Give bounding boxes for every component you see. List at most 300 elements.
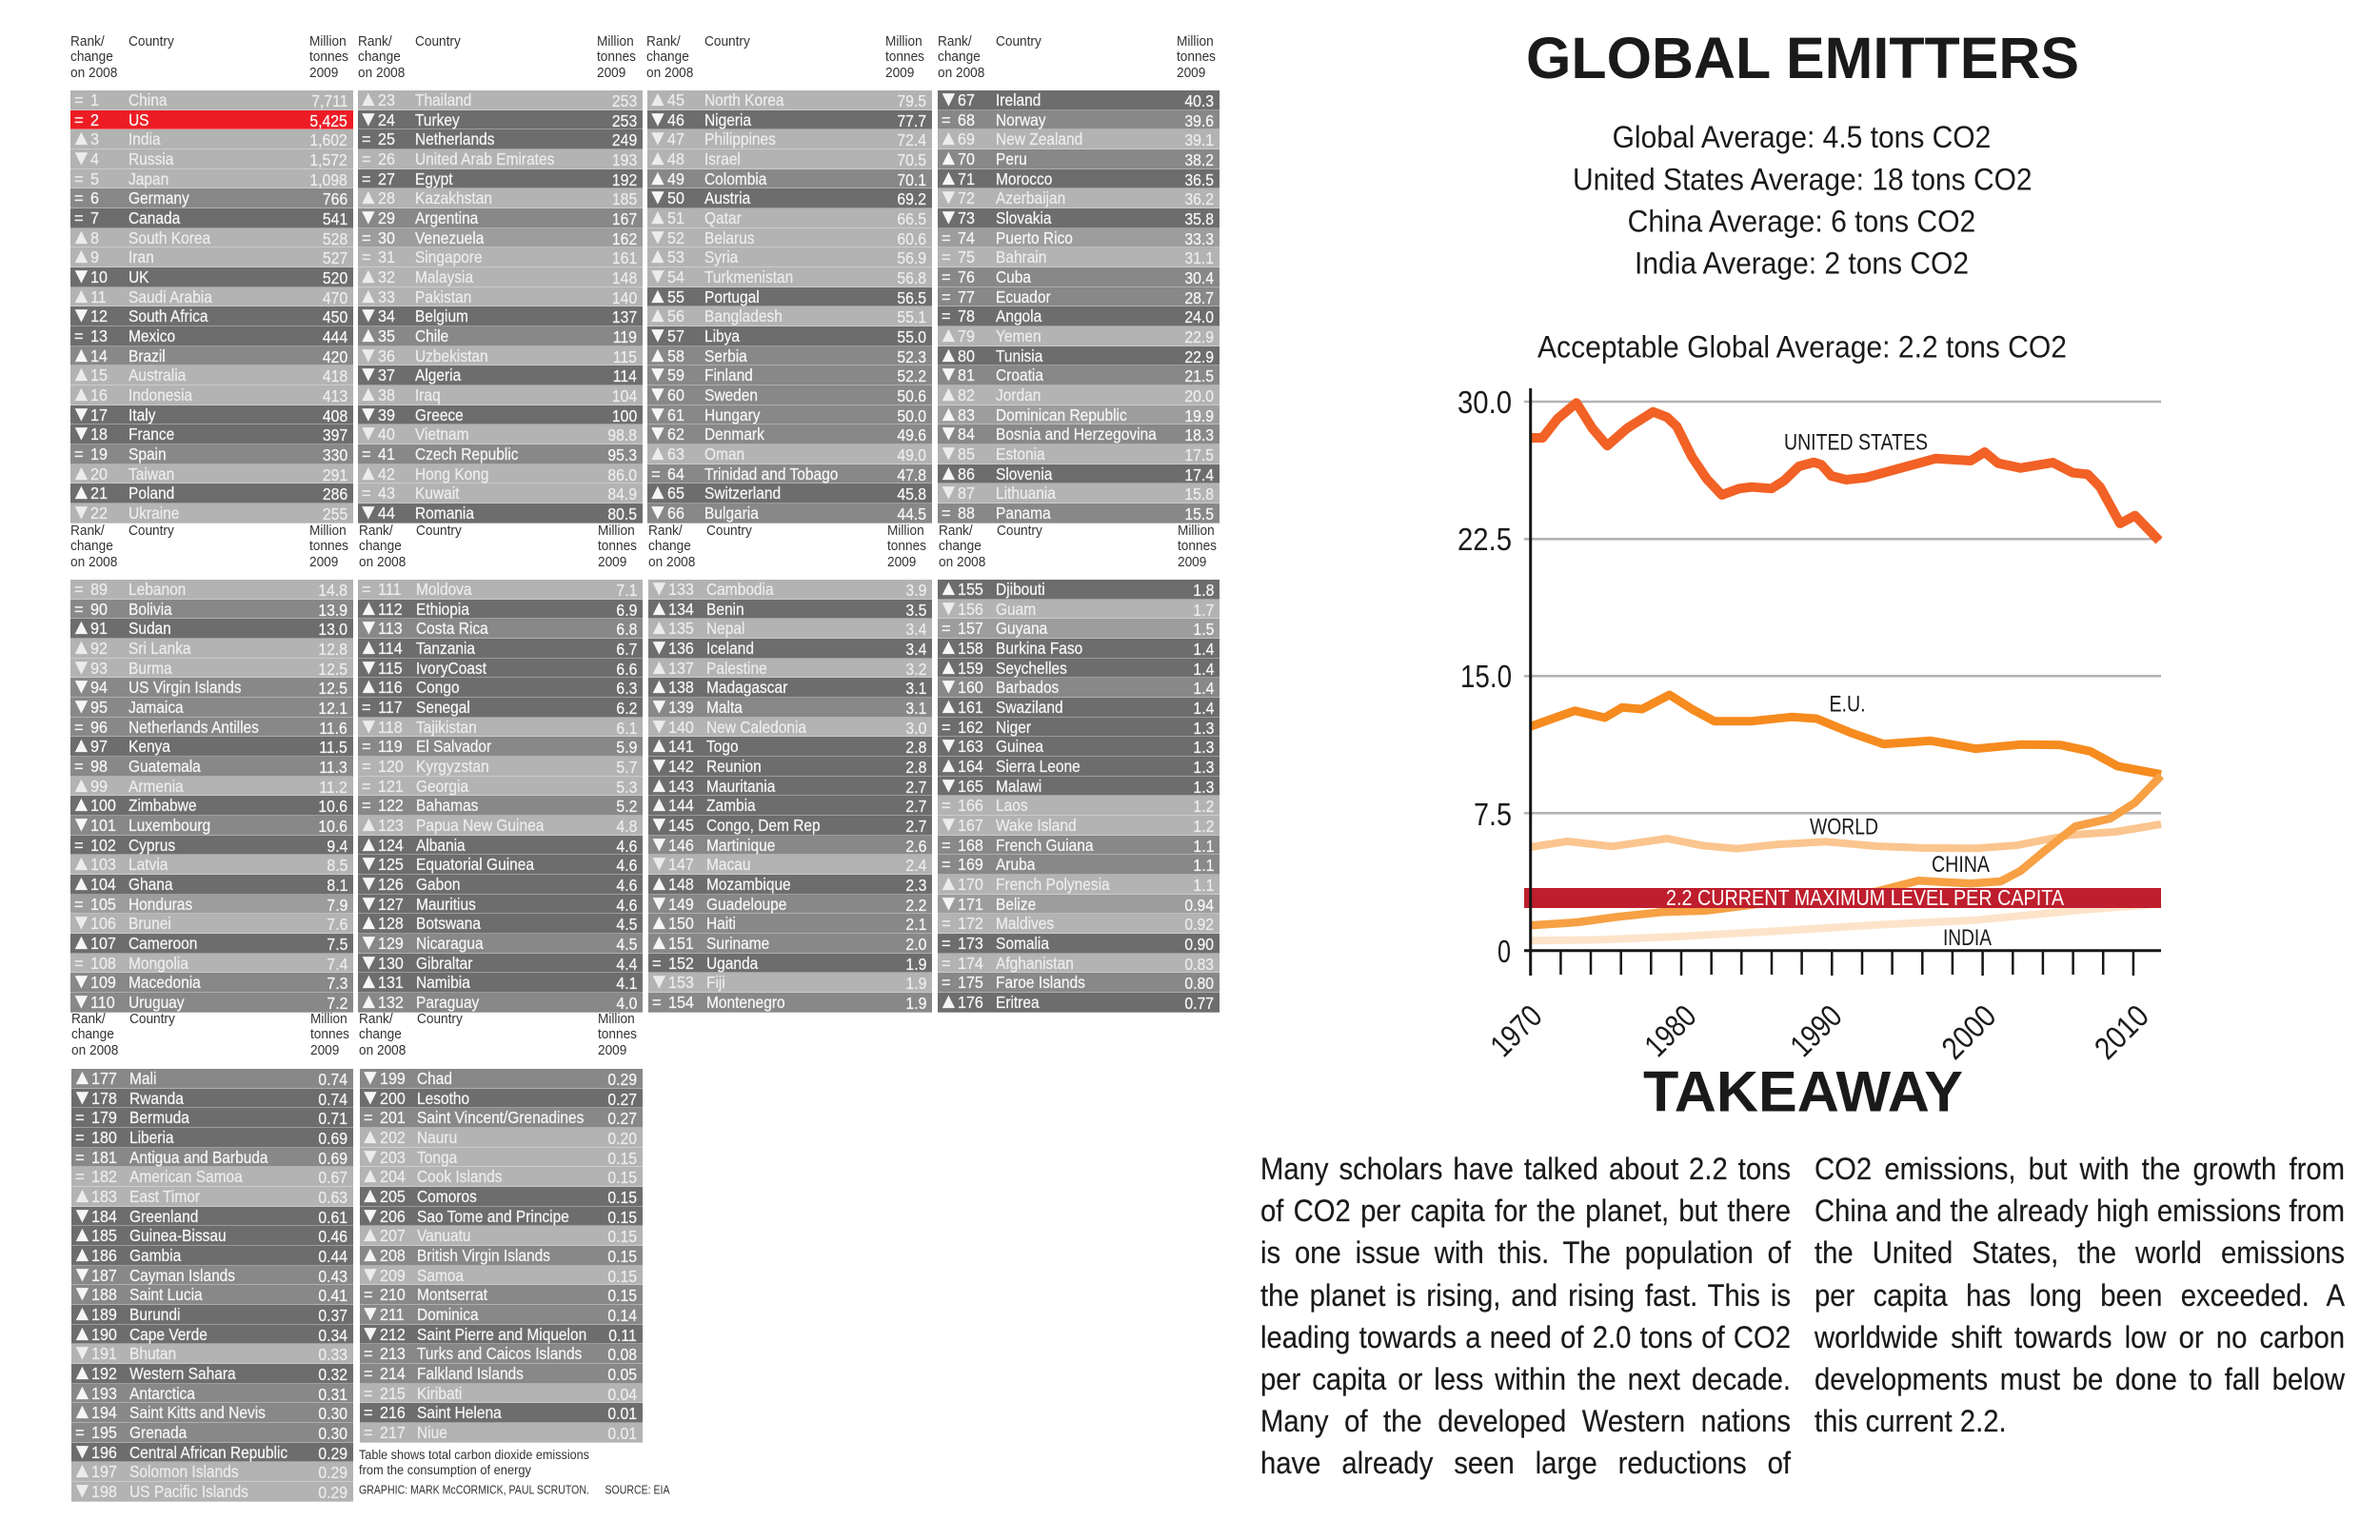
table column: ranks 1-22: 1 [90, 90, 99, 109]
table column: ranks 133-154: Togo [706, 737, 738, 756]
table column: ranks 177-198: 177 [91, 1069, 117, 1088]
table column: ranks 89-110: Guatemala [128, 757, 200, 776]
table column: ranks 23-44: = [362, 444, 370, 464]
table column: ranks 67-88: 21.5 [1184, 366, 1214, 385]
table column: ranks 67-88: Bosnia and Herzegovina [996, 424, 1156, 444]
table column: ranks 23-44: 23 [377, 90, 394, 109]
table column: ranks 177-198: 0.29 [318, 1444, 347, 1463]
table header: ranks 133-154: Million [887, 523, 924, 539]
y-axis labels: 30.0 [1458, 385, 1512, 421]
table column: ranks 67-88: 81 [958, 365, 975, 385]
table column: ranks 133-154: 2.7 [905, 797, 926, 816]
table column: ranks 111-132: 125 [378, 855, 404, 874]
table column: ranks 199-217: 0.11 [609, 1326, 637, 1345]
table column: ranks 199-217: = [364, 1344, 372, 1363]
table column: ranks 133-154: 3.1 [905, 679, 926, 698]
table header: ranks 199-217: on 2008 [359, 1042, 407, 1058]
table column: ranks 111-132: Georgia [415, 777, 468, 796]
takeaway text: right column: this current 2.2. [1815, 1404, 2007, 1438]
table column: ranks 67-88: 31.1 [1184, 248, 1214, 267]
table column: ranks 45-66: ▼ [647, 323, 668, 346]
table column: ranks 155-176: 166 [958, 796, 983, 815]
table column: ranks 67-88: 35.8 [1184, 209, 1214, 228]
table column: ranks 133-154: New Caledonia [706, 718, 806, 737]
table column: ranks 23-44: 27 [377, 169, 394, 188]
table column: ranks 67-88: Angola [996, 306, 1041, 326]
table column: ranks 155-176: ▲ [939, 753, 959, 777]
table column: ranks 67-88: 22.9 [1184, 327, 1214, 346]
table column: ranks 67-88: 39.1 [1184, 130, 1214, 149]
table column: ranks 199-217: 212 [379, 1325, 405, 1344]
table column: ranks 111-132: Congo [415, 678, 459, 697]
table header: ranks 67-88: on 2008 [938, 65, 984, 81]
red bar: 2.2 current maximum level: 2.2 CURRENT MAXIMUM LEVEL PER CAPITA [1666, 885, 2065, 910]
table column: ranks 133-154: Guadeloupe [706, 895, 786, 914]
table column: ranks 177-198: 0.32 [318, 1365, 347, 1384]
table column: ranks 23-44: 100 [612, 406, 637, 425]
table column: ranks 67-88: Azerbaijan [996, 188, 1065, 207]
table column: ranks 23-44: 43 [377, 484, 394, 503]
table column: ranks 1-22: 286 [323, 484, 347, 503]
table column: ranks 177-198: Mali [129, 1069, 156, 1088]
takeaway text: left column: is one issue with this. The population of [1260, 1235, 1791, 1270]
table column: ranks 45-66: Israel [704, 149, 741, 168]
table column: ranks 155-176: ▼ [939, 674, 959, 698]
table column: ranks 45-66: 47 [666, 129, 684, 148]
table column: ranks 67-88: Morocco [996, 169, 1052, 188]
table column: ranks 177-198: ▲ [72, 1380, 92, 1404]
table column: ranks 111-132: 5.2 [616, 797, 637, 816]
series labels: WORLD [1810, 814, 1878, 839]
table column: ranks 45-66: 77.7 [897, 111, 926, 130]
table column: ranks 111-132: Nicaragua [415, 934, 483, 953]
table header: ranks 45-66 [646, 33, 924, 81]
table header: ranks 177-198: on 2008 [71, 1042, 118, 1058]
table column: ranks 111-132: 119 [378, 737, 403, 756]
table column: ranks 45-66: ▼ [647, 126, 668, 149]
table column: ranks 199-217: Kiribati [417, 1384, 462, 1403]
table column: ranks 133-154: 2.8 [905, 758, 926, 777]
table column: ranks 23-44: 192 [612, 170, 637, 189]
table column: ranks 1-22: 5,425 [310, 111, 347, 130]
table column: ranks 111-132: 4.6 [616, 876, 637, 895]
table column: ranks 23-44: Uzbekistan [415, 346, 488, 365]
table column: ranks 23-44: Iraq [415, 385, 441, 405]
table column: ranks 133-154: Congo, Dem Rep [706, 816, 820, 835]
table header: ranks 155-176: change [939, 538, 982, 554]
table column: ranks 1-22: 541 [323, 209, 347, 228]
table column: ranks 199-217: Cook Islands [417, 1167, 503, 1186]
table column: ranks 1-22: 11 [90, 287, 107, 306]
table column: ranks 67-88: = [942, 267, 951, 286]
table column: ranks 155-176: 161 [958, 698, 983, 717]
table column: ranks 45-66: Switzerland [704, 484, 781, 503]
table column: ranks 45-66: 49.0 [897, 445, 926, 464]
table header: ranks 67-88: tonnes [1177, 49, 1216, 65]
table column: ranks 1-22: 7 [90, 208, 99, 227]
table column: ranks 1-22: Russia [128, 149, 173, 168]
table column: ranks 177-198: 193 [91, 1384, 117, 1403]
table column: ranks 199-217: 208 [379, 1246, 405, 1265]
table column: ranks 155-176: ▲ [939, 635, 959, 659]
table column: ranks 199-217: Montserrat [417, 1285, 487, 1304]
table column: ranks 23-44: = [362, 484, 370, 503]
table column: ranks 1-22: 9 [90, 247, 99, 267]
table column: ranks 89-110: = [74, 954, 84, 973]
table column: ranks 199-217: Nauru [417, 1128, 457, 1147]
table column: ranks 1-22: 6 [90, 188, 99, 207]
table column: ranks 177-198: 0.43 [318, 1267, 347, 1286]
table column: ranks 89-110: 8.5 [327, 856, 347, 875]
table column: ranks 111-132: 4.5 [616, 935, 637, 954]
table note and credits: GRAPHIC: MARK McCORMICK, PAUL SCRUTON. [359, 1483, 589, 1496]
table header: ranks 89-110: 2009 [309, 554, 338, 570]
table column: ranks 111-132: ▼ [358, 655, 379, 679]
table header: ranks 133-154: on 2008 [648, 554, 695, 570]
table column: ranks 111-132: 117 [378, 698, 403, 717]
table column: ranks 23-44: Czech Republic [415, 444, 518, 464]
table column: ranks 45-66: 60.6 [897, 229, 926, 248]
table column: ranks 133-154: 145 [668, 816, 694, 835]
table column: ranks 155-176: ▼ [939, 773, 959, 797]
table column: ranks 45-66: Bangladesh [704, 306, 783, 326]
table column: ranks 155-176: 164 [958, 757, 983, 776]
table column: ranks 45-66: 61 [666, 405, 684, 424]
table column: ranks 89-110: 97 [90, 737, 108, 756]
table column: ranks 67-88: ▼ [939, 362, 959, 385]
table column: ranks 155-176: = [942, 973, 951, 992]
table column: ranks 23-44: 37 [377, 365, 394, 385]
table column: ranks 23-44: ▲ [358, 382, 379, 405]
table column: ranks 67-88: 36.2 [1184, 189, 1214, 208]
table column: ranks 111-132: Albania [415, 836, 465, 855]
table column: ranks 133-154: 141 [668, 737, 694, 756]
table column: ranks 67-88: Dominican Republic [996, 405, 1126, 424]
table column: ranks 155-176: 165 [958, 777, 983, 796]
table column: ranks 199-217: = [364, 1285, 372, 1304]
table column: ranks 67-88: 86 [958, 464, 975, 484]
table column: ranks 23-44: 36 [377, 346, 394, 365]
table column: ranks 1-22: 21 [90, 484, 108, 503]
table column: ranks 133-154: 137 [668, 659, 694, 678]
table column: ranks 155-176: ▲ [939, 871, 959, 895]
table column: ranks 1-22: Canada [128, 208, 180, 227]
table column: ranks 155-176: = [942, 934, 951, 953]
table column: ranks 45-66: 72.4 [897, 130, 926, 149]
table column: ranks 23-44: ▼ [358, 205, 379, 228]
table column: ranks 133-154: 142 [668, 757, 694, 776]
table column: ranks 1-22: 19 [90, 444, 108, 464]
table column: ranks 111-132: 114 [378, 639, 403, 658]
table column: ranks 133-154: 134 [668, 600, 694, 619]
table header: ranks 89-110: Rank/ [70, 523, 105, 539]
takeaway text: left column: Many of the developed Western nations [1260, 1404, 1791, 1438]
table column: ranks 1-22: 470 [323, 288, 347, 307]
table column: ranks 1-22: = [74, 326, 84, 346]
table column: ranks 133-154: 140 [668, 718, 694, 737]
table column: ranks 45-66: Colombia [704, 169, 766, 188]
table header: ranks 133-154: Rank/ [648, 523, 683, 539]
table column: ranks 177-198: ▲ [72, 1242, 92, 1266]
table column: ranks 155-176: Barbados [996, 678, 1059, 697]
table column: ranks 155-176: 155 [958, 580, 983, 599]
table column: ranks 89-110: Ghana [128, 875, 172, 894]
table column: ranks 67-88: Tunisia [996, 346, 1042, 365]
table column: ranks 89-110: 9.4 [327, 837, 347, 856]
table column: ranks 177-198: 181 [91, 1148, 117, 1167]
table column: ranks 155-176: ▼ [939, 733, 959, 757]
table column: ranks 155-176: ▲ [939, 576, 959, 600]
table header: ranks 1-22: on 2008 [70, 65, 117, 81]
per-capita averages: India Average: 2 tons CO2 [1635, 246, 1969, 280]
table header: ranks 23-44: 2009 [596, 65, 625, 81]
table column: ranks 199-217: Falkland Islands [417, 1364, 524, 1383]
table column: ranks 111-132: Tanzania [415, 639, 475, 658]
table column: ranks 89-110: Mongolia [128, 954, 188, 973]
table column: ranks 111-132: 112 [378, 600, 403, 619]
table column: ranks 45-66: Bulgaria [704, 503, 759, 523]
table column: ranks 67-88: = [942, 110, 951, 129]
series labels [1784, 430, 1992, 951]
table column: ranks 133-154: ▲ [649, 596, 669, 620]
table column: ranks 177-198: Bhutan [129, 1344, 176, 1363]
table column: ranks 89-110: ▼ [70, 910, 91, 934]
table column: ranks 89-110: 11.6 [320, 719, 347, 738]
table column: ranks 1-22: = [74, 169, 84, 188]
table column: ranks 133-154: 3.1 [905, 699, 926, 718]
table column: ranks 199-217: 0.01 [607, 1424, 637, 1443]
table column: ranks 111-132: ▼ [358, 615, 379, 639]
per-capita averages [1573, 120, 2033, 280]
table column: ranks 133-154: ▲ [649, 871, 669, 895]
table header: ranks 67-88: Country [996, 33, 1041, 49]
table column: ranks 177-198: ▼ [72, 1203, 92, 1227]
table column: ranks 1-22: 13 [90, 326, 108, 346]
table column: ranks 67-88: 68 [958, 110, 975, 129]
table column: ranks 111-132: Tajikistan [415, 718, 476, 737]
table column: ranks 23-44: 84.9 [607, 484, 637, 503]
table column: ranks 23-44: 98.8 [607, 425, 637, 444]
table column: ranks 199-217: ▲ [360, 1163, 381, 1187]
table header: ranks 155-176: Rank/ [939, 523, 973, 539]
table column: ranks 111-132: = [362, 757, 371, 776]
table column: ranks 177-198: ▲ [72, 1360, 92, 1384]
table column: ranks 133-154: 139 [668, 698, 694, 717]
table column: ranks 89-110: 96 [90, 718, 108, 737]
table column: ranks 177-198: Antarctica [129, 1384, 194, 1403]
table column: ranks 133-154: Uganda [706, 954, 758, 973]
table column: ranks 155-176: Somalia [996, 934, 1048, 953]
table column: ranks 133-154: 2.3 [905, 876, 926, 895]
table header: ranks 45-66: 2009 [885, 65, 914, 81]
table column: ranks 89-110: 100 [90, 796, 116, 815]
table column: ranks 89-110: 98 [90, 757, 108, 776]
table header: ranks 45-66: change [646, 49, 689, 65]
table column: ranks 1-22: Ukraine [128, 503, 179, 523]
table column: ranks 67-88: Slovenia [996, 464, 1052, 484]
table column: ranks 111-132: ▲ [358, 832, 379, 856]
table column: ranks 133-154: 148 [668, 875, 694, 894]
table column: ranks 177-198: ▲ [72, 1399, 92, 1423]
table column: ranks 1-22: 528 [323, 229, 347, 248]
table column: ranks 45-66: ▼ [647, 402, 668, 425]
table header: ranks 111-132: Rank/ [359, 523, 392, 539]
table header: ranks 45-66: tonnes [885, 49, 924, 65]
table header: ranks 1-22: Million [309, 33, 347, 49]
table column: ranks 89-110: 110 [90, 993, 115, 1012]
table column: ranks 177-198: 178 [91, 1089, 117, 1108]
table column: ranks 1-22: = [74, 444, 84, 464]
table column: ranks 111-132: 6.1 [616, 719, 637, 738]
table column: ranks 111-132: 4.8 [616, 817, 637, 836]
table column: ranks 177-198: 0.31 [318, 1385, 347, 1404]
table column: ranks 67-88: ▲ [939, 166, 959, 189]
table column: ranks 23-44: = [362, 129, 370, 148]
table column: ranks 23-44: Venezuela [415, 228, 484, 247]
x-axis year labels: 1990 [1783, 998, 1849, 1063]
table column: ranks 45-66: Trinidad and Tobago [704, 464, 838, 484]
table column: ranks 199-217: = [364, 1364, 372, 1383]
table column: ranks 199-217: 0.15 [607, 1286, 637, 1305]
table column: ranks 89-110: Luxembourg [128, 816, 210, 835]
table column: ranks 45-66: 50.6 [897, 386, 926, 405]
table column: ranks 67-88: 18.3 [1184, 425, 1214, 444]
x-axis year labels: 1980 [1637, 998, 1703, 1063]
table column: ranks 199-217: ▼ [360, 1085, 381, 1109]
table column: ranks 45-66: 52.3 [897, 347, 926, 366]
table column: ranks 23-44: 39 [377, 405, 394, 424]
table column: ranks 155-176: Maldives [996, 914, 1054, 933]
table column: ranks 177-198: 0.74 [318, 1070, 347, 1089]
table column: ranks 111-132: ▼ [358, 714, 379, 738]
table column: ranks 177-198: 0.69 [318, 1149, 347, 1168]
table column: ranks 133-154: Fiji [706, 973, 724, 992]
table column: ranks 1-22: Iran [128, 247, 153, 267]
table column: ranks 155-176: 168 [958, 836, 983, 855]
table column: ranks 133-154: ▲ [649, 733, 669, 757]
table column: ranks 67-88: 20.0 [1184, 386, 1214, 405]
table column: ranks 1-22: Japan [128, 169, 169, 188]
table header: ranks 133-154: tonnes [887, 538, 926, 554]
table column: ranks 155-176: 163 [958, 737, 983, 756]
table column: ranks 45-66: ▼ [647, 264, 668, 287]
table header: ranks 1-22 [70, 33, 348, 81]
table column: ranks 199-217: ▼ [360, 1065, 381, 1089]
y-axis labels [1458, 385, 1512, 970]
table column: ranks 23-44: ▼ [358, 500, 379, 523]
table column: ranks 133-154: = [652, 954, 662, 973]
table column: ranks 1-22: ▲ [70, 225, 91, 248]
table column: ranks 67-88: 38.2 [1184, 150, 1214, 169]
y-axis labels: 15.0 [1460, 660, 1512, 695]
table column: ranks 67-88: 78 [958, 306, 975, 326]
table column: ranks 89-110: 7.5 [327, 935, 347, 954]
table column: ranks 177-198: ▼ [72, 1340, 92, 1364]
table column: ranks 1-22: UK [128, 267, 149, 286]
table column: ranks 133-154: ▼ [649, 812, 669, 836]
table column: ranks 23-44: 80.5 [607, 504, 637, 523]
table column: ranks 177-198: ▼ [72, 1281, 92, 1305]
table column: ranks 45-66: Finland [704, 365, 753, 385]
table column: ranks 133-154: Benin [706, 600, 744, 619]
table column: ranks 133-154: 2.7 [905, 817, 926, 836]
table column: ranks 133-154: Suriname [706, 934, 769, 953]
table column: ranks 155-176: Burkina Faso [996, 639, 1082, 658]
table column: ranks 45-66: 65 [666, 484, 684, 503]
table column: ranks 199-217: 215 [379, 1384, 405, 1403]
table column: ranks 177-198: 194 [91, 1403, 117, 1422]
table column: ranks 45-66: 62 [666, 424, 684, 444]
table column: ranks 67-88: 77 [958, 287, 975, 306]
table column: ranks 89-110: 12.1 [318, 699, 347, 718]
table note and credits [359, 1448, 670, 1496]
table column: ranks 1-22: 255 [323, 504, 347, 523]
table column: ranks 177-198: ▼ [72, 1085, 92, 1109]
table column: ranks 23-44: 162 [612, 229, 637, 248]
table column: ranks 155-176: 1.1 [1193, 876, 1214, 895]
table column: ranks 1-22: 420 [323, 347, 347, 366]
table column: ranks 67-88: 30.4 [1184, 268, 1214, 287]
table column: ranks 155-176: 0.77 [1184, 994, 1214, 1013]
table column: ranks 67-88: ▲ [939, 323, 959, 346]
table column: ranks 111-132: ▲ [358, 596, 379, 620]
table column: ranks 177-198 [71, 1065, 353, 1502]
table header: ranks 23-44: on 2008 [358, 65, 405, 81]
table column: ranks 23-44: 25 [377, 129, 394, 148]
table column: ranks 45-66: ▲ [647, 343, 668, 366]
table column: ranks 177-198: ▲ [72, 1321, 92, 1345]
table column: ranks 111-132: = [362, 698, 371, 717]
table column: ranks 177-198: ▲ [72, 1222, 92, 1246]
table column: ranks 111-132: 131 [378, 973, 404, 992]
table column: ranks 155-176: 1.4 [1193, 640, 1214, 659]
table column: ranks 199-217: 200 [379, 1089, 405, 1108]
table column: ranks 1-22: Italy [128, 405, 155, 424]
table column: ranks 1-22: 291 [323, 465, 347, 484]
table column: ranks 133-154: ▲ [649, 674, 669, 698]
table column: ranks 89-110: 106 [90, 914, 116, 933]
table column: ranks 23-44: 86.0 [607, 465, 637, 484]
table column: ranks 133-154: 144 [668, 796, 694, 815]
takeaway text: left column: of CO2 per capita for the planet, but there [1260, 1194, 1791, 1228]
table header: ranks 177-198: tonnes [310, 1026, 349, 1042]
table column: ranks 23-44: 24 [377, 110, 394, 129]
table column: ranks 1-22: 444 [323, 327, 347, 346]
table column: ranks 111-132: ▲ [358, 812, 379, 836]
table column: ranks 111-132: 123 [378, 816, 404, 835]
table column: ranks 111-132: 4.4 [616, 955, 637, 974]
table column: ranks 45-66: = [651, 464, 660, 484]
table column: ranks 1-22: Poland [128, 484, 174, 503]
table column: ranks 111-132: = [362, 777, 371, 796]
table column: ranks 155-176: Niger [996, 718, 1031, 737]
table column: ranks 199-217: ▼ [360, 1321, 381, 1345]
table column: ranks 23-44: ▼ [358, 362, 379, 385]
table column: ranks 133-154: 3.4 [905, 640, 926, 659]
table header: ranks 177-198 [71, 1011, 349, 1058]
table column: ranks 177-198: 198 [91, 1482, 117, 1501]
table column: ranks 199-217: 216 [379, 1403, 405, 1422]
table column: ranks 89-110: 12.5 [318, 660, 347, 679]
takeaway text: right column: worldwide shift towards low or no carbon [1815, 1320, 2345, 1354]
table header: ranks 1-22: change [70, 49, 113, 65]
table column: ranks 155-176: 170 [958, 875, 983, 894]
table column: ranks 23-44: 119 [613, 327, 637, 346]
table column: ranks 45-66: Denmark [704, 424, 764, 444]
table column: ranks 199-217: 203 [379, 1148, 405, 1167]
table column: ranks 199-217: 0.29 [607, 1070, 637, 1089]
table header: ranks 111-132: Country [416, 523, 462, 539]
